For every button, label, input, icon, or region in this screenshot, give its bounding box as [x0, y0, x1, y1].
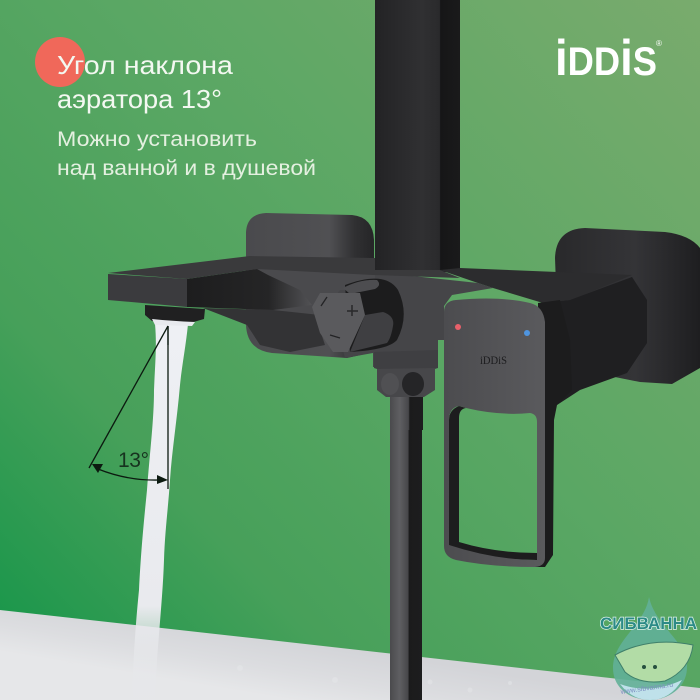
title: Угол наклона	[57, 50, 234, 80]
knob housing	[345, 279, 404, 352]
right wall plate	[555, 228, 700, 384]
window inner shadow	[449, 406, 537, 560]
shower pipe	[390, 397, 423, 700]
nut	[377, 368, 435, 397]
aerator	[145, 305, 205, 326]
watermark tub	[615, 642, 693, 682]
spout	[108, 256, 460, 352]
angle arc with arrowheads	[92, 464, 168, 484]
mixer body: centre	[330, 272, 493, 367]
hot indicator	[455, 324, 461, 330]
collar	[374, 350, 438, 372]
shower column	[375, 0, 460, 272]
watermark drop	[613, 597, 687, 700]
brand logo: ®	[656, 39, 662, 48]
lever front face with window	[444, 299, 545, 567]
watermark: sibvanna	[600, 597, 697, 700]
subtitle: Можно установить	[57, 128, 257, 151]
watermark url: www.sibvanna.ru	[619, 682, 674, 696]
watermark name: СИБВАННА	[600, 614, 697, 633]
vertical line over water top	[167, 326, 169, 345]
angle diagram: 13 degrees	[89, 326, 168, 489]
lever logo: iDDiS	[480, 353, 507, 367]
spout side	[187, 269, 312, 310]
knob upper lip	[343, 280, 379, 294]
diverter knob	[312, 279, 404, 352]
spout front face	[108, 274, 187, 307]
subtitle	[57, 128, 316, 180]
mixer body: right block	[440, 268, 647, 405]
spout top face	[108, 256, 460, 279]
knob stem	[350, 312, 393, 352]
lever handle	[444, 299, 572, 567]
bathtub edge	[0, 610, 700, 700]
title	[57, 50, 234, 114]
watermark face	[642, 665, 657, 669]
left wall plate	[246, 213, 374, 358]
lever dark side	[533, 300, 572, 567]
coral circle accent	[35, 37, 85, 87]
hose connector	[374, 350, 438, 397]
brand logo: iDDiS	[555, 30, 657, 86]
right block side	[543, 277, 647, 405]
spout rear body	[257, 269, 375, 315]
water stream	[132, 324, 188, 700]
hex knob face	[312, 293, 365, 352]
subtitle: над ванной и в душевой	[57, 157, 316, 180]
title: аэратора 13°	[57, 84, 222, 114]
angle line: vertical	[167, 326, 169, 489]
angle line: inclined	[89, 326, 168, 468]
cold indicator	[524, 330, 530, 336]
watermark base	[620, 680, 682, 700]
right block top face	[440, 268, 632, 303]
angle value: 13°	[118, 449, 149, 472]
spout underside	[203, 300, 325, 352]
